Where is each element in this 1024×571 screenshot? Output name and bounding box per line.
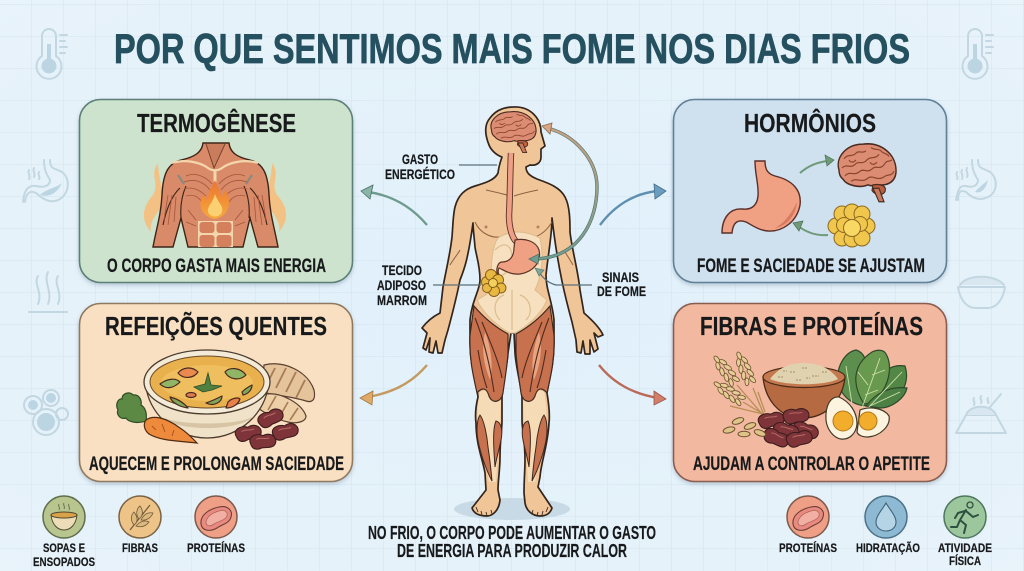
ground shadow — [454, 498, 570, 520]
arrow: to refeições quentes — [360, 365, 427, 405]
icon: proteínas: PROTEÍNAS — [187, 540, 245, 555]
central human figure — [422, 107, 603, 520]
body silhouette — [422, 107, 603, 516]
illustration: stomach brain and fat cells — [722, 144, 896, 247]
label: sinais de fome: DE FOME — [597, 284, 646, 299]
abdomen and pelvis — [477, 232, 547, 333]
label: sinais de fome — [535, 268, 646, 299]
esophagus and stomach — [497, 153, 540, 276]
panel: refeições quentes — [80, 304, 352, 482]
heading: refeições quentes: REFEIÇÕES QUENTES — [105, 311, 327, 341]
panel: hormônios — [674, 100, 946, 282]
body anatomy details — [450, 190, 573, 265]
icon: faint rice bowl right — [956, 394, 1006, 433]
heading: termogênese: TERMOGÊNESE — [137, 108, 296, 138]
icon: faint steam — [29, 272, 67, 312]
icon: atividade física: ATIVIDADE — [938, 541, 992, 555]
icon: proteínas direita — [779, 496, 837, 555]
icon: faint thermometer left — [37, 29, 67, 79]
panel: termogênese — [80, 100, 352, 282]
arrow: to hormônios — [600, 184, 666, 225]
icon: atividade física: FÍSICA — [949, 553, 981, 568]
brown adipose tissue — [482, 270, 506, 296]
icon: faint stomach left — [23, 160, 68, 202]
icon: faint cells — [24, 390, 68, 435]
icon: fibras: FIBRAS — [122, 541, 158, 555]
icon: sopas e ensopados: ENSOPADOS — [33, 555, 95, 569]
icon: sopas e ensopados: SOPAS E — [43, 541, 85, 555]
label: gasto energético: GASTO — [402, 152, 438, 167]
label: tecido adiposo marrom: TECIDO — [382, 263, 422, 278]
panel: fibras e proteínas — [674, 304, 946, 482]
caption: fibras e proteínas: AJUDAM A CONTROLAR O APETITE — [693, 454, 930, 475]
brain in head — [491, 112, 536, 153]
caption: refeições quentes: AQUECEM E PROLONGAM SACIEDADE — [89, 454, 344, 475]
icon: faint bowl right — [958, 277, 1005, 308]
footer statement: DE ENERGIA PARA PRODUZIR CALOR — [397, 541, 627, 561]
label: gasto energético: ENERGÉTICO — [385, 167, 455, 182]
label: sinais de fome: SINAIS — [602, 270, 639, 285]
illustration: grains, beans, eggs and greens — [709, 349, 907, 449]
icon: sopas e ensopados — [33, 496, 95, 569]
icon: hidratação — [856, 496, 920, 555]
footer statement: NO FRIO, O CORPO PODE AUMENTAR O GASTO — [368, 523, 656, 543]
caption: termogênese: O CORPO GASTA MAIS ENERGIA — [107, 256, 326, 277]
icon: proteínas — [187, 496, 245, 555]
icon: fibras — [119, 496, 161, 555]
illustration: torso with flame — [144, 143, 286, 247]
icon: faint stomach right — [956, 160, 996, 200]
arrow: to fibras e proteínas — [599, 365, 666, 405]
heading: fibras e proteínas: FIBRAS E PROTEÍNAS — [700, 311, 923, 341]
icon: faint thermometer right — [962, 29, 993, 79]
icon: atividade física — [938, 496, 992, 568]
arrow: to termogênese — [361, 185, 427, 225]
thigh and calf muscles — [470, 306, 554, 516]
heading: hormônios: HORMÔNIOS — [744, 108, 876, 138]
caption: hormônios: FOME E SACIEDADE SE AJUSTAM — [697, 256, 925, 277]
label: tecido adiposo marrom: MARROM — [377, 293, 427, 308]
arrow: stomach to brain — [529, 123, 597, 264]
icon: hidratação: HIDRATAÇÃO — [856, 540, 920, 555]
illustration: soup, carrot, chicken and beans — [117, 350, 315, 450]
icon: proteínas direita: PROTEÍNAS — [779, 540, 837, 555]
label: tecido adiposo marrom: ADIPOSO — [377, 278, 426, 293]
label: tecido adiposo marrom — [377, 263, 481, 308]
label: gasto energético — [385, 152, 497, 182]
footer statement — [368, 523, 656, 561]
